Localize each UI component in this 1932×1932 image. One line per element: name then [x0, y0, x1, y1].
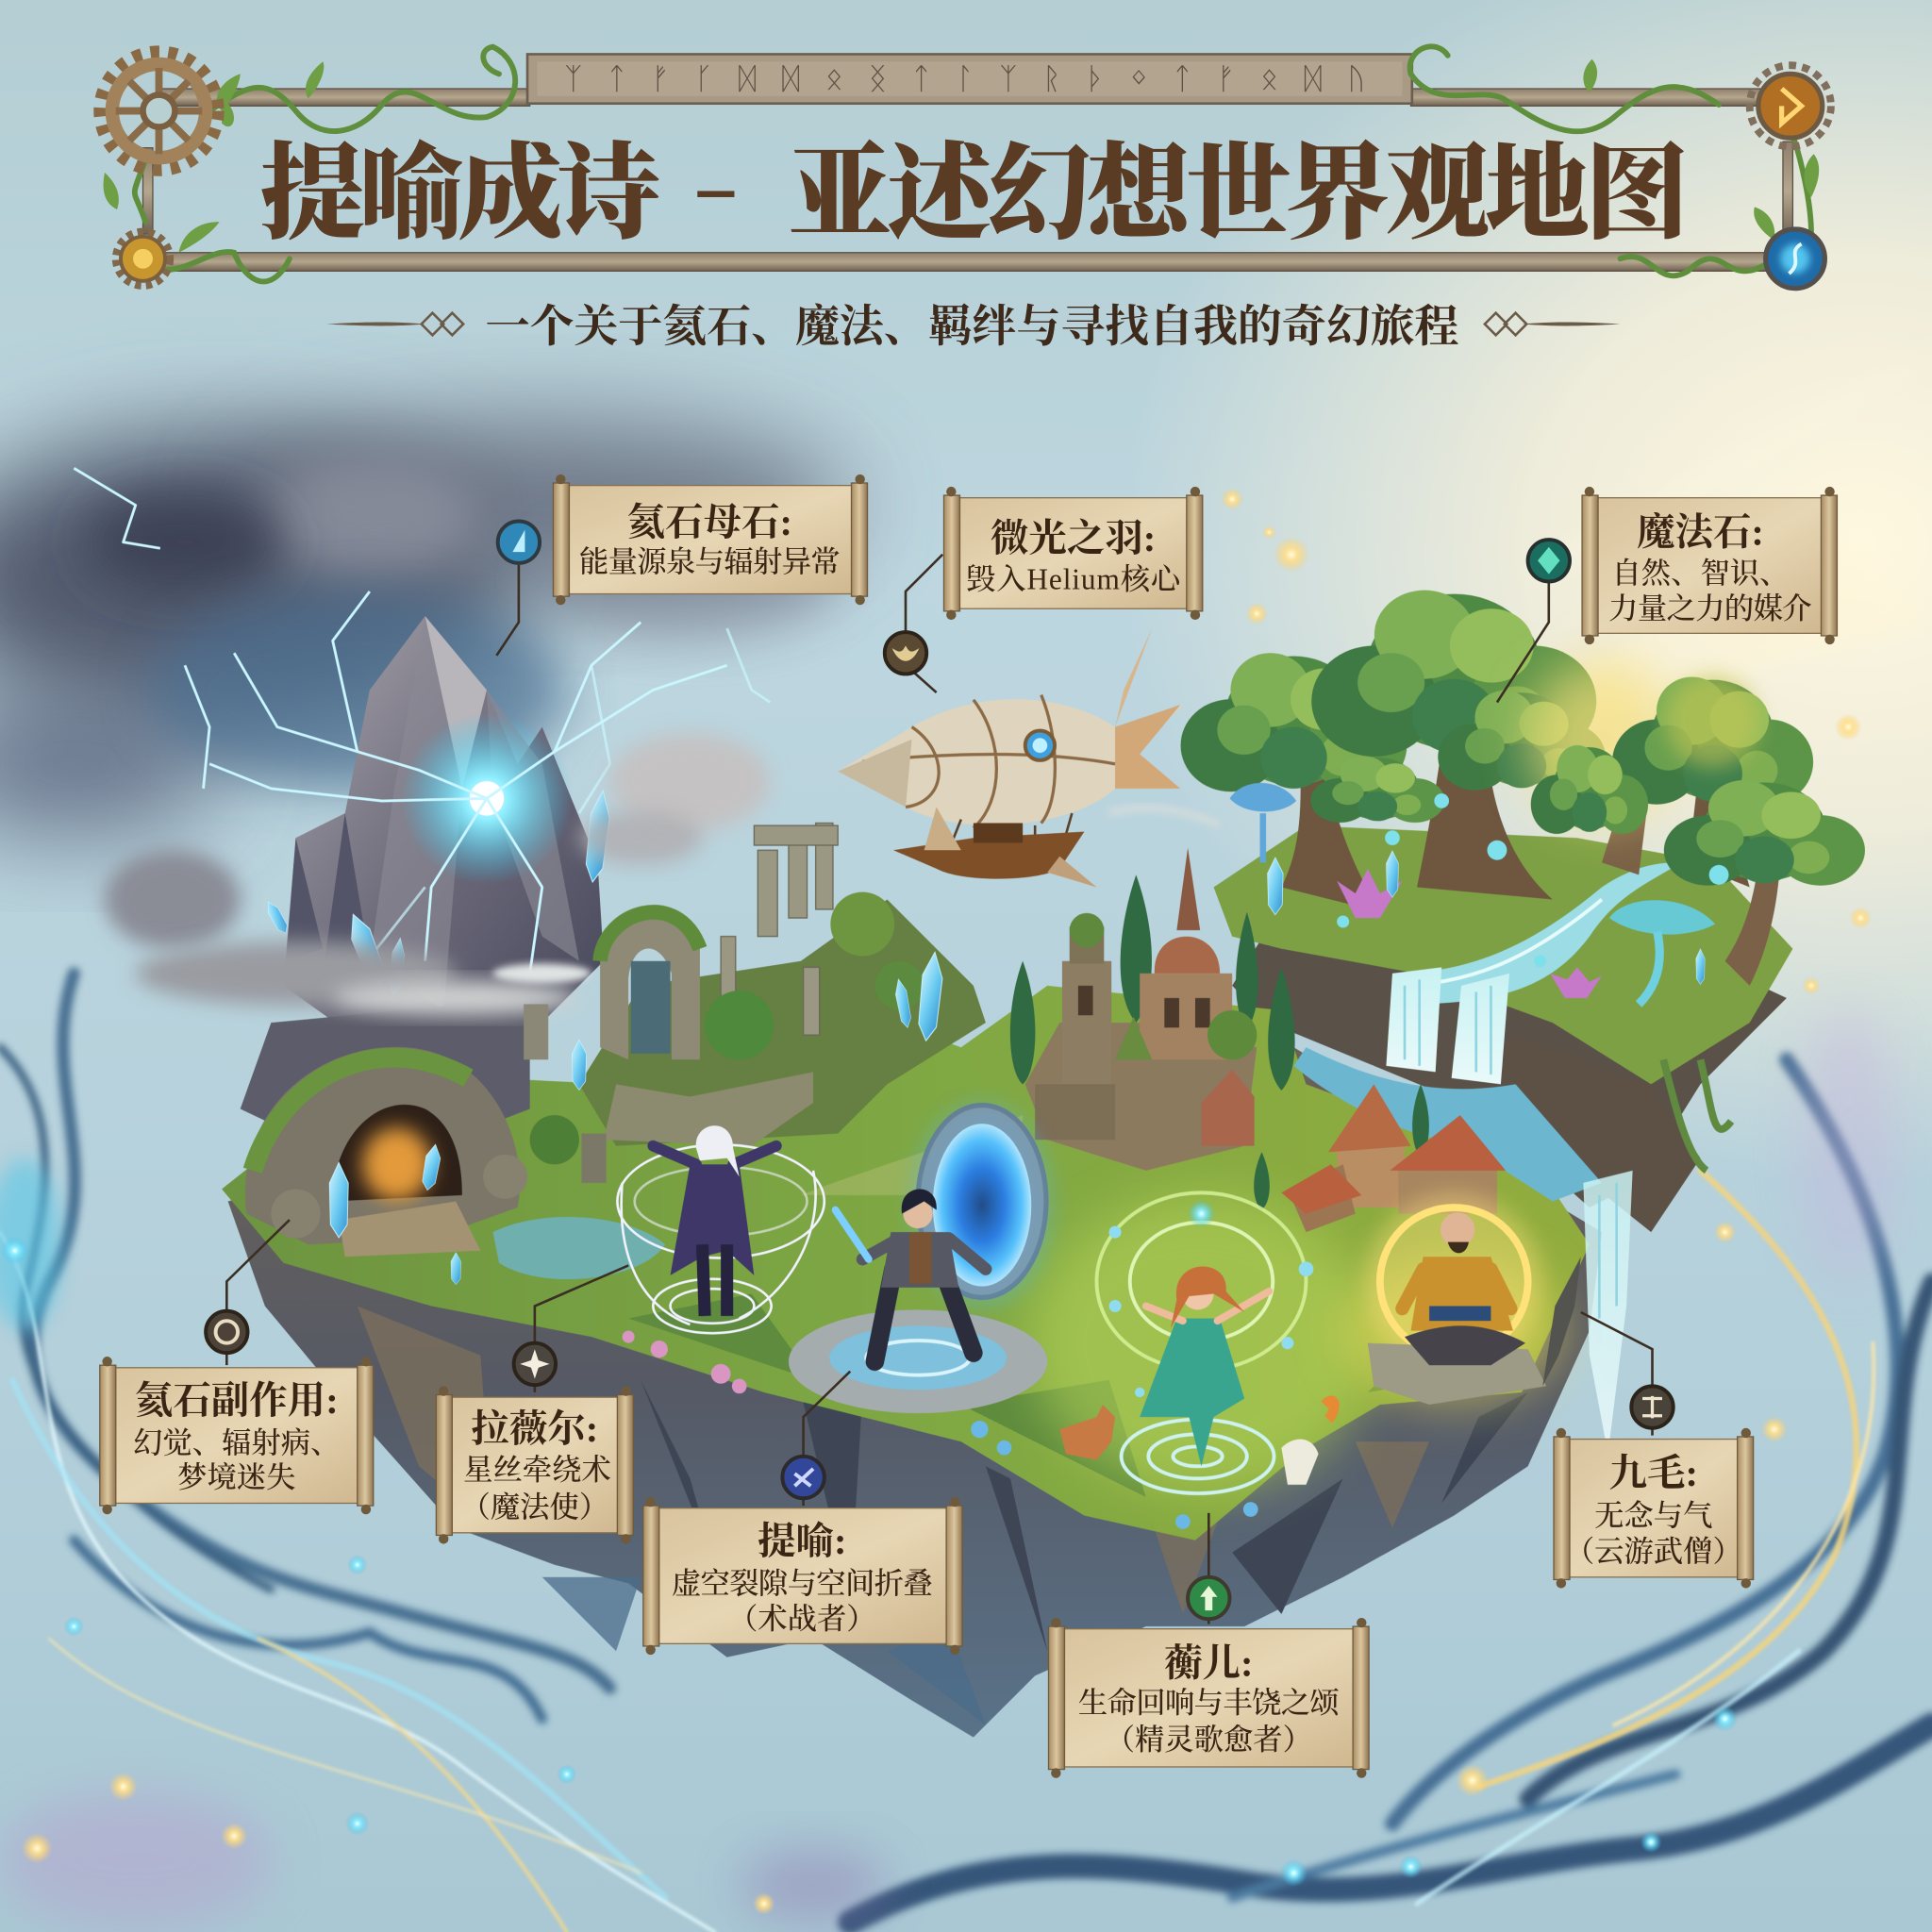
pin: side effects — [206, 1311, 248, 1353]
scroll: 蘅儿: 生命回响与丰饶之颂 — [1078, 1687, 1340, 1720]
scroll: 氦石副作用: 幻觉、辐射病、 — [133, 1426, 340, 1459]
scroll: 九毛 — [1554, 1428, 1754, 1589]
pin: Laviel — [514, 1343, 556, 1385]
title: 提喻成诗 — [260, 137, 661, 253]
character: swordsman Synecdoche — [836, 1190, 986, 1361]
lotus and crystals — [1337, 869, 1602, 998]
drifting smoke clouds — [105, 733, 770, 1015]
scroll: 魔法石: 自然、智识、 — [1611, 557, 1789, 590]
character: monk Jiumao — [1365, 1192, 1581, 1405]
grass surface — [222, 986, 1590, 1541]
scroll: 拉薇尔: 拉薇尔: — [471, 1407, 598, 1450]
golden gear bottom left — [116, 232, 170, 286]
scroll: 提喻 — [643, 1497, 962, 1655]
scroll: 氦石母石: 能量源泉与辐射异常 — [579, 545, 841, 578]
floating island — [222, 825, 1792, 1738]
star-silk rings — [617, 1144, 824, 1333]
lightning — [74, 468, 770, 974]
scroll: 蘅儿: 蘅儿: — [1164, 1641, 1254, 1684]
scroll: 拉薇尔: 星丝牵绕术 — [463, 1454, 611, 1487]
pin: magic stone — [1528, 540, 1570, 581]
scroll: 拉薇尔: （魔法使） — [461, 1491, 608, 1524]
scroll: 拉薇尔 — [436, 1386, 633, 1544]
character: mage Laviel — [617, 1125, 824, 1333]
scroll: 九毛: 九毛: — [1609, 1452, 1698, 1494]
scroll: 蘅儿 — [1049, 1618, 1369, 1778]
frame rails — [129, 89, 1799, 271]
rune mountain with energy core — [74, 468, 770, 1171]
rune plaque — [527, 54, 1412, 104]
scroll: 魔法石: 魔法石: — [1637, 510, 1764, 553]
scroll: 氦石副作用: 梦境迷失 — [177, 1460, 295, 1493]
scroll: 氦石母石 — [553, 475, 868, 605]
village houses — [1281, 1084, 1506, 1232]
pin: airship — [885, 632, 926, 674]
title: 亚述幻想世界观地图 — [788, 137, 1690, 253]
rune plaque: ᛉᛏᚠᚴᛞᛞᛟᛝᛏᛚᛉᚱᚦᛜᛏᚠᛟᛞᚢ — [564, 62, 1365, 96]
island rocky underside — [228, 1047, 1602, 1738]
scroll: 提喻: 提喻: — [758, 1520, 846, 1562]
pin: Heng'er — [1188, 1577, 1230, 1619]
character: elf singer Heng'er — [1096, 1192, 1313, 1493]
scroll: 提喻: （术战者） — [728, 1603, 876, 1636]
header frame — [102, 46, 1831, 289]
scroll: 九毛: （云游武僧） — [1565, 1535, 1742, 1568]
blue rune medallion bottom right — [1766, 229, 1824, 289]
pin: Jiumao — [1631, 1386, 1674, 1428]
glowing mushrooms — [1609, 900, 1715, 935]
bronze gear top left — [102, 54, 216, 168]
mossy ruins — [524, 823, 986, 1183]
scroll: 九毛: 无念与气 — [1594, 1499, 1712, 1532]
blue crystals near mountain — [583, 788, 612, 885]
cypress trees — [1010, 874, 1429, 1210]
scroll: 提喻: 虚空裂隙与空间折叠 — [672, 1567, 933, 1600]
leader lines — [226, 555, 1653, 1624]
healing swirls — [1096, 1192, 1306, 1370]
climbing vines — [129, 46, 1811, 281]
companion animals — [623, 1331, 1334, 1529]
scroll: 魔法石: 力量之力的媒介 — [1608, 592, 1812, 625]
title — [260, 137, 1690, 253]
scroll: 微光之羽: 微光之羽: — [991, 517, 1156, 559]
crystal cave — [245, 1047, 527, 1285]
right forest plateau — [1214, 825, 1792, 1084]
portal platform — [789, 1102, 1054, 1413]
pin: Synecdoche — [782, 1457, 824, 1498]
magical forest — [1181, 591, 1865, 1004]
stone town — [1010, 848, 1429, 1210]
airship — [838, 628, 1220, 887]
ruined arch — [600, 912, 700, 1059]
monk's blade — [1542, 1257, 1581, 1386]
scroll: 氦石副作用 — [100, 1357, 374, 1514]
scroll: 微光之羽 — [943, 487, 1203, 620]
scroll: 蘅儿: （精灵歌愈者） — [1106, 1724, 1312, 1757]
scroll: 氦石副作用: 氦石副作用: — [135, 1379, 339, 1422]
storm clouds — [0, 419, 850, 838]
blue portal — [918, 1106, 1046, 1297]
scroll: 微光之羽: 毁入Helium核心 — [966, 562, 1183, 595]
scroll: 魔法石 — [1582, 487, 1837, 644]
pin: crystal mother stone — [498, 521, 540, 563]
sparkles — [1, 488, 1872, 1915]
amber rune medallion top right — [1750, 65, 1831, 146]
swirling magical ink currents — [0, 974, 1932, 1932]
subtitle: 一个关于氦石、魔法、羁绊与寻找自我的奇幻旅程 — [486, 303, 1458, 352]
ruined columns — [721, 823, 838, 1035]
river — [1293, 1047, 1602, 1201]
scroll: 氦石母石: 氦石母石: — [627, 501, 792, 543]
waterfalls — [1386, 967, 1441, 1072]
